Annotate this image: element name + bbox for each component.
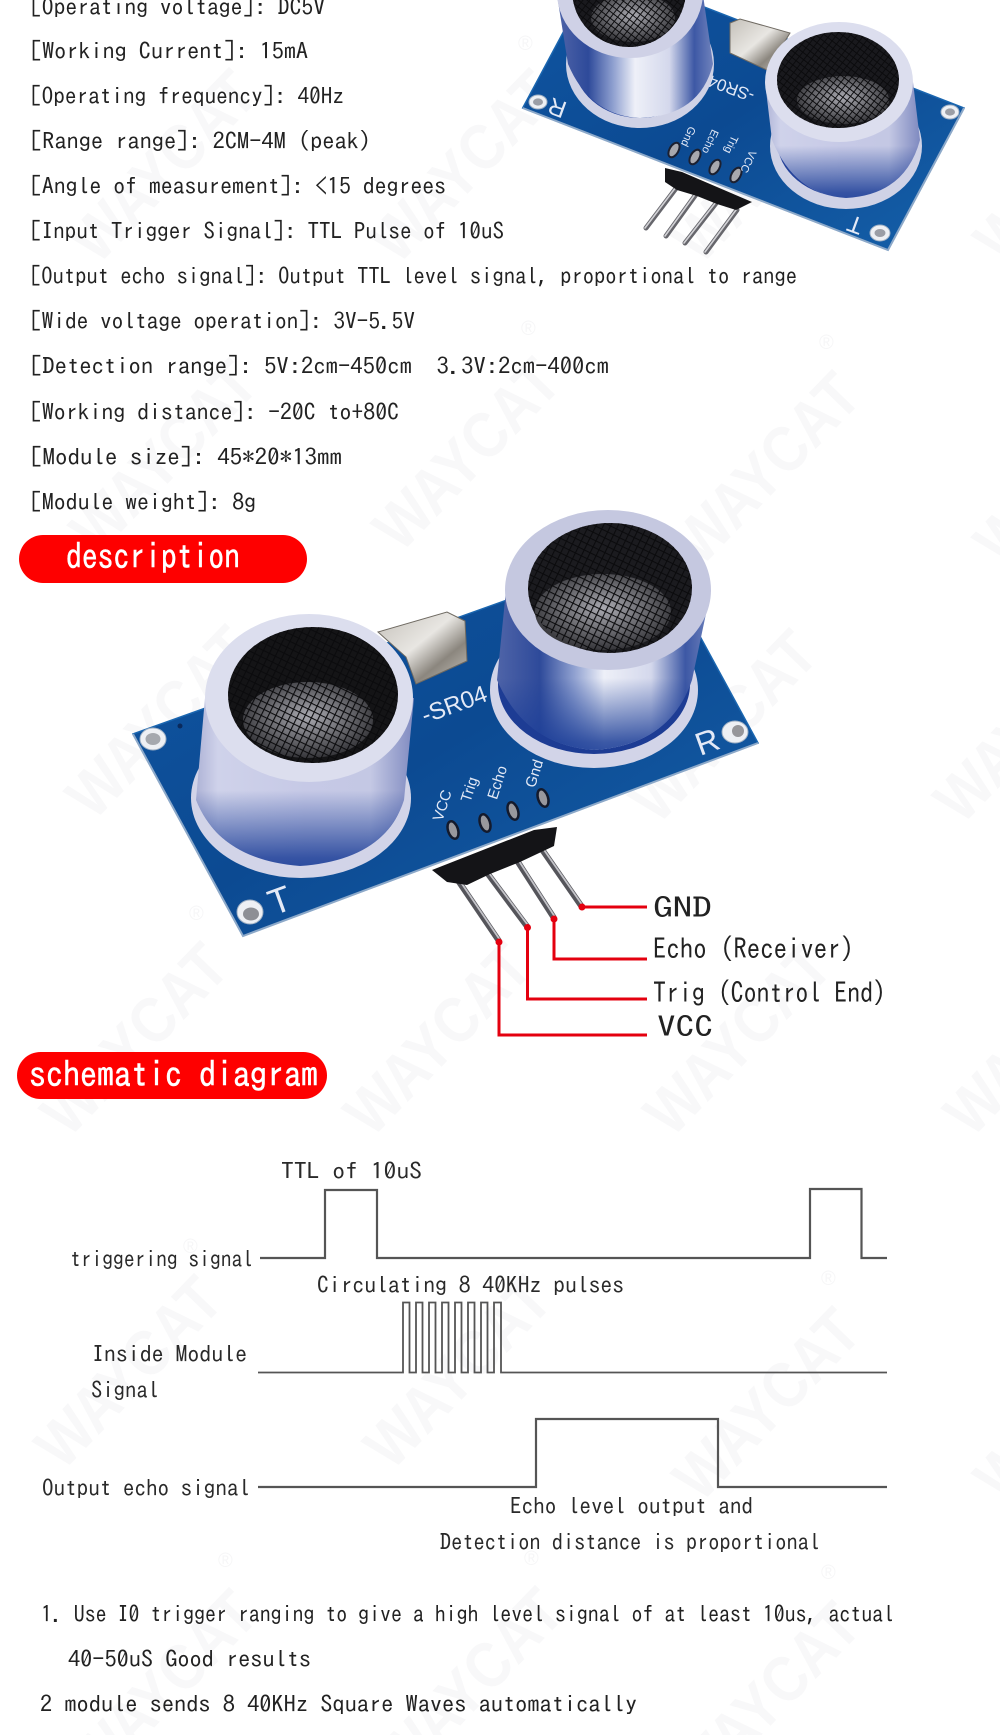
background watermarks: WAYCAT — [330, 617, 545, 836]
pin labels: Gnd — [522, 757, 547, 790]
background watermarks: WAYCAT — [27, 930, 242, 1149]
pin labels: Echo — [699, 127, 720, 155]
right transducer can — [765, 22, 922, 209]
timing labels: triggering signal — [70, 1247, 253, 1270]
pin labels: Gnd — [678, 124, 698, 148]
background watermarks: ® — [524, 1548, 539, 1570]
background watermarks: ® — [183, 1236, 198, 1258]
solder pads — [445, 788, 551, 840]
photo: top ultrasonic module — [523, 0, 964, 252]
background watermarks: WAYCAT — [356, 57, 571, 276]
background watermarks: WAYCAT — [21, 1263, 236, 1482]
section heading: schematic diagram: schematic diagram — [29, 1056, 318, 1092]
background watermarks: WAYCAT — [52, 613, 267, 832]
pin labels: Trig — [458, 775, 482, 804]
specification list: [Output echo signal]: Output TTL level signal, proportional to range — [30, 264, 797, 287]
background watermarks: ® — [819, 332, 834, 354]
timing labels: Output echo signal — [42, 1476, 250, 1499]
background watermarks: WAYCAT — [330, 930, 545, 1149]
board marks — [262, 721, 724, 923]
board edge highlight — [523, 108, 964, 250]
pin labels: VCC — [737, 148, 758, 174]
background watermarks: ® — [518, 33, 533, 55]
timing labels: Circulating 8 40KHz pulses — [317, 1273, 624, 1296]
crystal — [730, 19, 790, 70]
small via — [178, 724, 182, 728]
left transducer can — [557, 0, 714, 128]
specification list: [Working distance]: -20C to+80C — [30, 400, 399, 423]
specification list: [Detection range]: 5V:2cm-450cm 3.3V:2cm-400cm — [30, 354, 609, 377]
callout labels — [653, 894, 886, 1041]
header block — [665, 168, 752, 210]
photo: main ultrasonic module — [133, 510, 758, 941]
pin callouts — [496, 894, 886, 1041]
specification list: [Range range]: 2CM-4M (peak) — [30, 129, 371, 152]
background watermarks: WAYCAT — [56, 347, 271, 566]
leader lines — [499, 907, 647, 1035]
background watermarks: WAYCAT — [56, 57, 271, 276]
callout labels: Echo (Receiver) — [653, 935, 854, 963]
header pins — [645, 187, 737, 252]
pcb board — [523, 0, 964, 250]
solder pads — [666, 141, 744, 184]
pin labels: Trig — [721, 133, 740, 155]
specification list: [Wide voltage operation]: 3V-5.5V — [30, 309, 415, 332]
specification list: [Input Trigger Signal]: TTL Pulse of 10uS — [30, 219, 504, 242]
background watermarks: WAYCAT — [350, 1263, 565, 1482]
board marks — [545, 71, 867, 239]
mounting holes — [140, 721, 748, 924]
timing diagram — [42, 1159, 887, 1553]
background watermarks: WAYCAT — [659, 1295, 874, 1514]
background watermarks: ® — [821, 1562, 836, 1584]
mounting holes — [529, 95, 959, 241]
background watermarks: ® — [521, 318, 536, 340]
echo waveform — [258, 1419, 887, 1487]
usage notes: 40-50uS Good results — [68, 1647, 311, 1670]
board marks: R — [690, 721, 724, 763]
callout labels: VCC — [657, 1013, 713, 1041]
specification list: [Angle of measurement]: <15 degrees — [30, 174, 446, 197]
front transducer can — [191, 614, 414, 878]
specification list: [Working Current]: 15mA — [30, 39, 309, 62]
timing labels: Detection distance is proportional — [440, 1530, 820, 1553]
rear transducer can — [490, 510, 711, 768]
background watermarks: WAYCAT — [630, 930, 845, 1149]
leader dots — [496, 904, 586, 946]
specification list — [30, 0, 797, 513]
pin labels: VCC — [430, 788, 456, 823]
timing labels: TTL of 10uS — [281, 1159, 422, 1182]
pin labels — [430, 757, 547, 823]
header block — [432, 827, 557, 885]
timing labels: Echo level output and — [510, 1494, 753, 1517]
module pulse waveform — [258, 1302, 887, 1372]
timing labels: Signal — [91, 1378, 159, 1401]
callout labels: Trig (Control End) — [653, 979, 886, 1007]
usage notes: 2 module sends 8 40KHz Square Waves automatically — [40, 1692, 637, 1715]
board marks: T — [262, 877, 297, 923]
usage notes: 1. Use I0 trigger ranging to give a high level signal of at least 10us, actual — [41, 1602, 894, 1625]
background watermarks: WAYCAT — [359, 345, 574, 564]
usage notes — [40, 1602, 894, 1715]
board edge highlight — [133, 734, 758, 936]
trigger waveform — [260, 1189, 887, 1258]
background watermarks: ® — [218, 1550, 233, 1572]
callout labels: GND — [653, 894, 712, 922]
background watermarks: ® — [189, 903, 204, 925]
background watermarks: WAYCAT — [659, 359, 874, 578]
pin labels: Echo — [484, 764, 511, 802]
crystal — [378, 612, 467, 684]
specification list: [Module weight]: 8g — [30, 490, 256, 513]
pcb board — [133, 548, 758, 936]
pin labels — [678, 124, 758, 174]
specification list: [Module size]: 45*20*13mm — [30, 445, 342, 468]
background watermarks: ® — [821, 1268, 836, 1290]
header pins — [457, 847, 583, 941]
board marks: -SR04 — [705, 71, 757, 105]
board marks: R — [545, 91, 570, 123]
timing labels: Inside Module — [92, 1342, 247, 1365]
background watermarks: WAYCAT — [616, 617, 831, 836]
board marks: T — [844, 209, 867, 239]
specification list: [Operating frequency]: 40Hz — [30, 84, 344, 107]
timing labels — [42, 1159, 820, 1553]
section heading: description: description — [66, 538, 240, 574]
background watermarks: WAYCAT — [659, 57, 874, 276]
section heading: description — [19, 535, 307, 583]
silkscreen model text: -SR04 — [418, 681, 491, 729]
